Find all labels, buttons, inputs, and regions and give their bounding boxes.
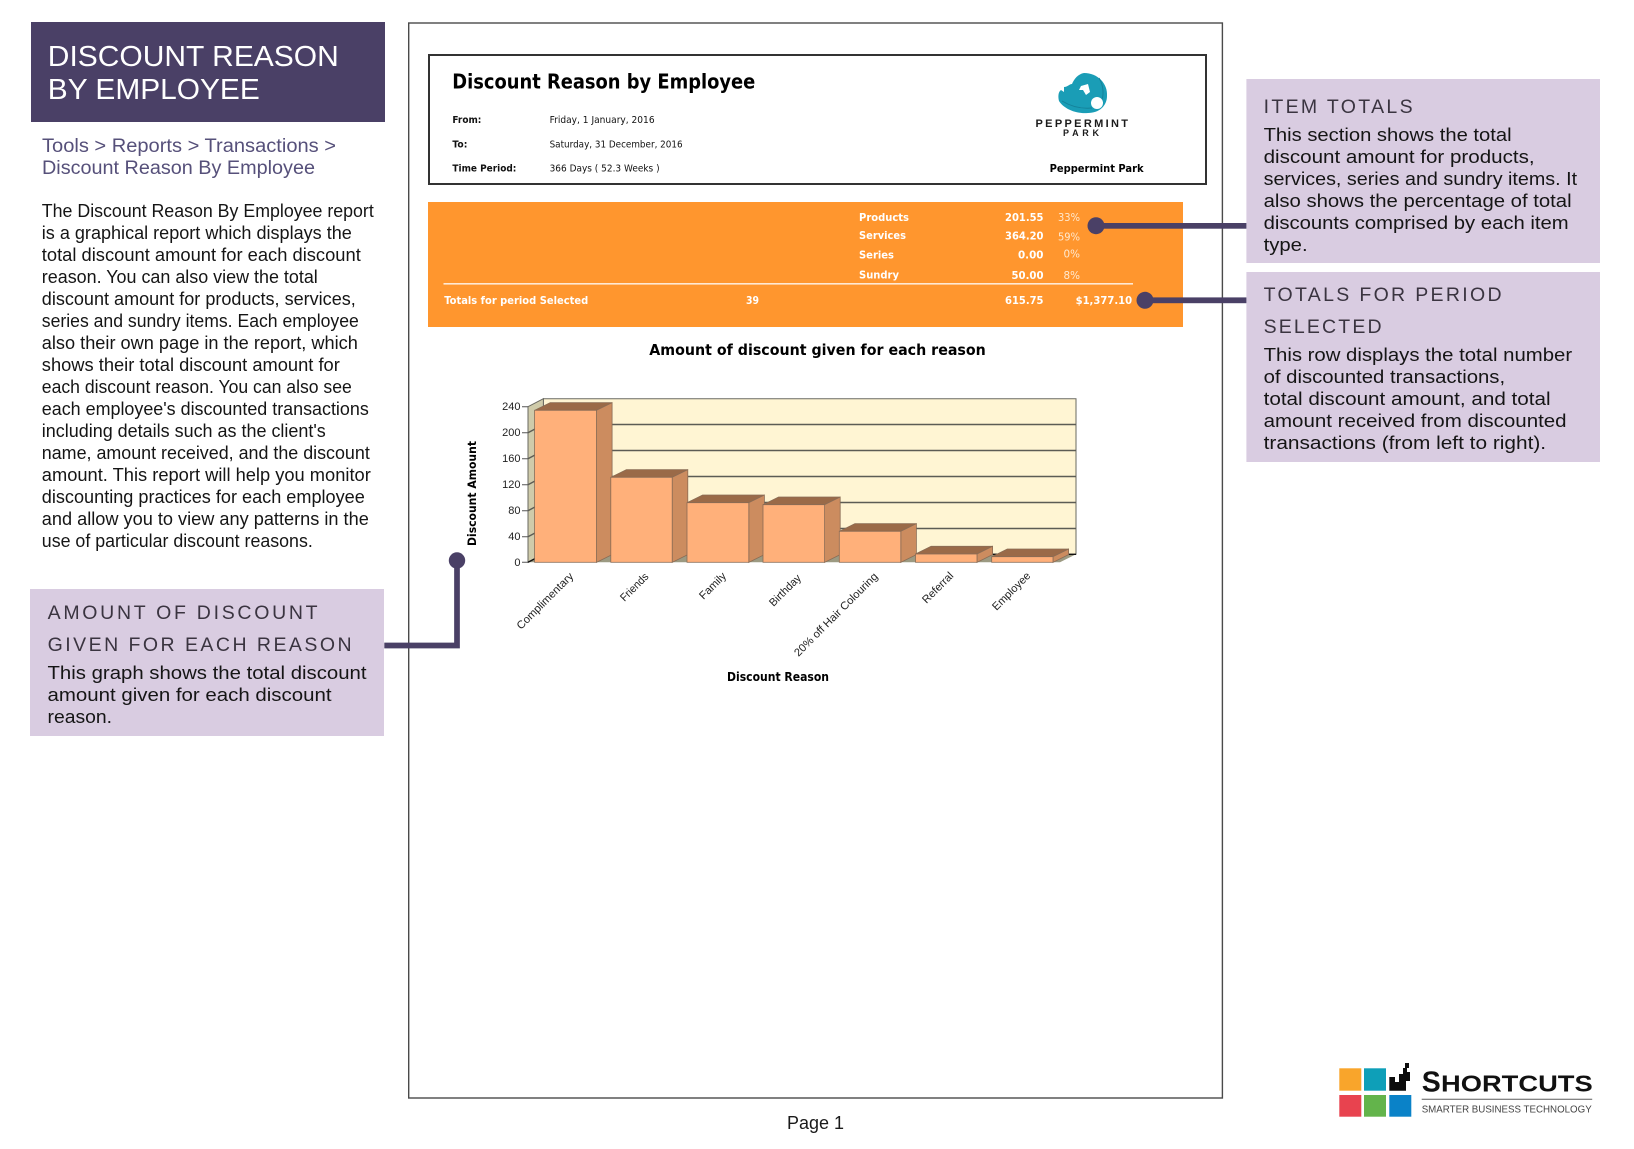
item totals rows: 364.20: [1005, 230, 1044, 242]
panel: report header: Friday, 1 January, 2016: [550, 115, 655, 126]
chart heading: Amount of discount given for each reason: [649, 341, 986, 359]
callout: totals for period selected: This row displays the total number: [1264, 345, 1572, 365]
panel: report page: [409, 23, 1222, 1098]
icon: Peppermint Park logo: PEPPERMINT: [1036, 118, 1128, 130]
item totals rows: 8%: [1064, 270, 1080, 282]
logo: Shortcuts: S: [1422, 1067, 1441, 1099]
panel: report header: 366 Days ( 52.3 Weeks ): [550, 163, 660, 174]
item totals rows: 0.00: [1018, 249, 1044, 261]
bar: Birthday: [763, 497, 840, 562]
text block: report description: discounting practices for each employee: [42, 487, 365, 507]
breadcrumb navigation path: [42, 136, 336, 179]
callout: item totals: ITEM TOTALS: [1264, 96, 1413, 118]
text block: report description: is a graphical report which displays the: [42, 223, 352, 243]
x axis tick labels: 20% off Hair Colouring: [792, 571, 881, 659]
bar: Complimentary: [535, 403, 612, 562]
text block: report description: total discount amount for each discount: [42, 245, 361, 265]
bar: Referral: [916, 546, 993, 562]
bar: 20% off Hair Colouring: [839, 524, 916, 562]
title banner: [31, 22, 385, 122]
totals for period row: [444, 295, 1132, 307]
panel: report header: Time Period:: [452, 163, 516, 174]
text block: report description: also their own page in the report, which: [42, 333, 358, 353]
y axis title: Discount Amount: [465, 441, 479, 546]
callout: amount of discount given for each reason: amount given for each discount: [48, 685, 332, 705]
callout: item totals: type.: [1264, 235, 1308, 255]
text block: report description: name, amount received, and the discount: [42, 443, 370, 463]
callout: amount of discount given for each reason: reason.: [48, 707, 112, 727]
breadcrumb navigation path: Discount Reason By Employee: [42, 158, 315, 179]
callout: totals for period selected: amount received from discounted: [1264, 411, 1567, 431]
icon: Peppermint Park logo: [1036, 73, 1128, 138]
panel: report header: Saturday, 31 December, 2016: [550, 139, 683, 150]
x axis tick labels: Birthday: [767, 572, 804, 609]
callout: item totals: discounts comprised by each item: [1264, 213, 1569, 233]
panel: report header: From:: [452, 115, 481, 126]
panel: report header: [429, 55, 1206, 184]
y axis tick labels: 80: [508, 505, 520, 517]
callout: amount of discount given for each reason: AMOUNT OF DISCOUNT: [48, 602, 318, 624]
callout: item totals: [1246, 79, 1600, 263]
item totals rows: 0%: [1064, 248, 1080, 260]
title banner: DISCOUNT REASON: [48, 41, 339, 73]
callout: amount of discount given for each reason: [30, 589, 384, 736]
y axis tick labels: 120: [502, 479, 520, 491]
text block: report description: each discount reason. You can also see: [42, 377, 352, 397]
text block: report description: including details such as the client's: [42, 421, 326, 441]
x axis tick labels: Complimentary: [515, 570, 577, 632]
item totals rows: Series: [859, 249, 894, 261]
totals for period row: 39: [746, 295, 759, 307]
item totals rows: Services: [859, 230, 906, 242]
text block: report description: shows their total discount amount for: [42, 355, 340, 375]
text block: report description: The Discount Reason By Employee report: [42, 201, 374, 221]
text block: report description: reason. You can also view the total: [42, 267, 318, 287]
panel: report header: Peppermint Park: [1050, 162, 1144, 175]
text block: report description: discount amount for products, services,: [42, 289, 356, 309]
item totals rows: Products: [859, 212, 909, 224]
breadcrumb navigation path: Tools > Reports > Transactions >: [42, 136, 336, 157]
totals for period row: 615.75: [1005, 295, 1044, 307]
arrow: item totals connector: [1088, 217, 1246, 234]
bar chart: discount amount by reason: [465, 399, 1076, 659]
panel: orange totals: [428, 202, 1183, 327]
arrow: totals for period connector: [1136, 292, 1246, 309]
text block: report description: each employee's discounted transactions: [42, 399, 369, 419]
x axis title: Discount Reason: [727, 670, 829, 684]
x axis tick labels: Friends: [618, 571, 652, 604]
title banner: BY EMPLOYEE: [48, 74, 260, 106]
callout: totals for period selected: [1246, 272, 1600, 462]
callout: amount of discount given for each reason: This graph shows the total discount: [48, 663, 366, 683]
bar: Employee: [992, 549, 1069, 562]
item totals rows: 33%: [1058, 212, 1080, 224]
panel: report header: Discount Reason by Employee: [452, 69, 755, 93]
x axis tick labels: Referral: [920, 570, 956, 606]
x axis tick labels: [515, 570, 1033, 659]
bar: Friends: [611, 470, 688, 562]
text block: report description: use of particular discount reasons.: [42, 531, 313, 551]
callout: totals for period selected: of discounted transactions,: [1264, 367, 1505, 387]
item totals rows: 59%: [1058, 232, 1080, 244]
callout: totals for period selected: SELECTED: [1264, 316, 1382, 338]
y axis tick labels: 240: [502, 401, 520, 413]
totals for period row: $1,377.10: [1076, 295, 1132, 307]
y axis tick labels: [502, 401, 520, 569]
y axis tick labels: 160: [502, 453, 520, 465]
callout: item totals: discount amount for products,: [1264, 147, 1535, 167]
callout: totals for period selected: TOTALS FOR PERIOD: [1264, 284, 1502, 306]
totals for period row: Totals for period Selected: [444, 295, 588, 307]
item totals rows: Sundry: [859, 270, 899, 282]
callout: item totals: services, series and sundry items. It: [1264, 169, 1577, 189]
item totals rows: 50.00: [1012, 270, 1044, 282]
y axis tick labels: 0: [514, 557, 520, 569]
text block: report description: and allow you to view any patterns in the: [42, 509, 369, 529]
y axis tick labels: 40: [508, 531, 520, 543]
callout: item totals: This section shows the total: [1264, 125, 1512, 145]
text block: report description: [42, 201, 374, 551]
logo: Shortcuts: SMARTER BUSINESS TECHNOLOGY: [1422, 1105, 1592, 1116]
arrow: chart callout connector: [384, 552, 465, 646]
icon: Peppermint Park logo: PARK: [1063, 128, 1100, 138]
logo: Shortcuts: [1339, 1063, 1593, 1117]
item totals rows: [859, 212, 1080, 282]
x axis tick labels: Employee: [990, 570, 1033, 613]
item totals rows: 201.55: [1005, 212, 1044, 224]
panel: report header: To:: [452, 139, 467, 150]
text block: report description: amount. This report will help you monitor: [42, 465, 371, 485]
callout: amount of discount given for each reason: GIVEN FOR EACH REASON: [48, 634, 352, 656]
text block: report description: series and sundry items. Each employee: [42, 311, 359, 331]
callout: totals for period selected: transactions (from left to right).: [1264, 433, 1546, 453]
bar: Family: [687, 495, 764, 562]
callout: totals for period selected: total discount amount, and total: [1264, 389, 1551, 409]
callout: item totals: also shows the percentage of total: [1264, 191, 1572, 211]
page number: Page 1: [787, 1112, 844, 1133]
x axis tick labels: Family: [697, 570, 729, 602]
logo: Shortcuts: HORTCUTS: [1441, 1071, 1593, 1097]
y axis tick labels: 200: [502, 427, 520, 439]
